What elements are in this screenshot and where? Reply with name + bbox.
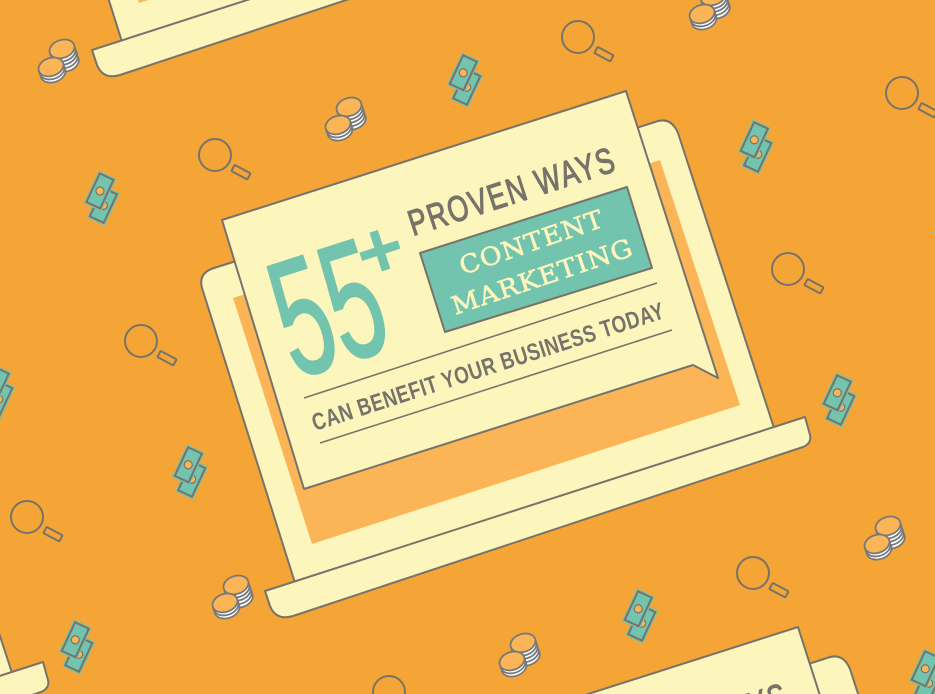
laptop: top-left repeat — [28, 0, 637, 76]
banner: content marketing: CONTENT — [456, 204, 608, 281]
laptop with speech-bubble paper — [201, 91, 810, 617]
heading: 55+: + — [344, 200, 415, 299]
subheading with rule lines — [304, 283, 672, 443]
subheading with rule lines: CAN BENEFIT YOUR BUSINESS TODAY — [309, 298, 668, 437]
banner: content marketing: MARKETING — [448, 233, 637, 321]
heading: proven ways: PROVEN WAYS — [403, 139, 621, 244]
banner: content marketing — [420, 187, 652, 332]
laptop: bottom-left repeat — [0, 336, 48, 694]
heading: 55+: 55 — [249, 203, 407, 413]
